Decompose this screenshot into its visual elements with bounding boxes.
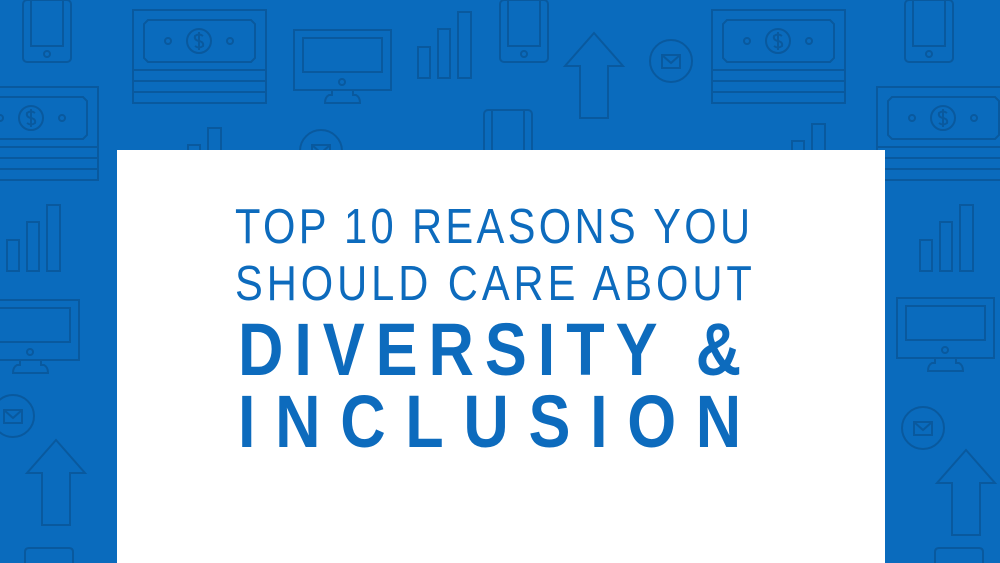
title text (235, 199, 752, 463)
title line 4 bold: INCLUSION (238, 380, 741, 463)
title line 1: TOP 10 REASONS YOU (235, 199, 750, 254)
white title panel (117, 150, 885, 563)
title line 3 bold: DIVERSITY & (238, 308, 741, 391)
title line 2: SHOULD CARE ABOUT (235, 256, 752, 311)
